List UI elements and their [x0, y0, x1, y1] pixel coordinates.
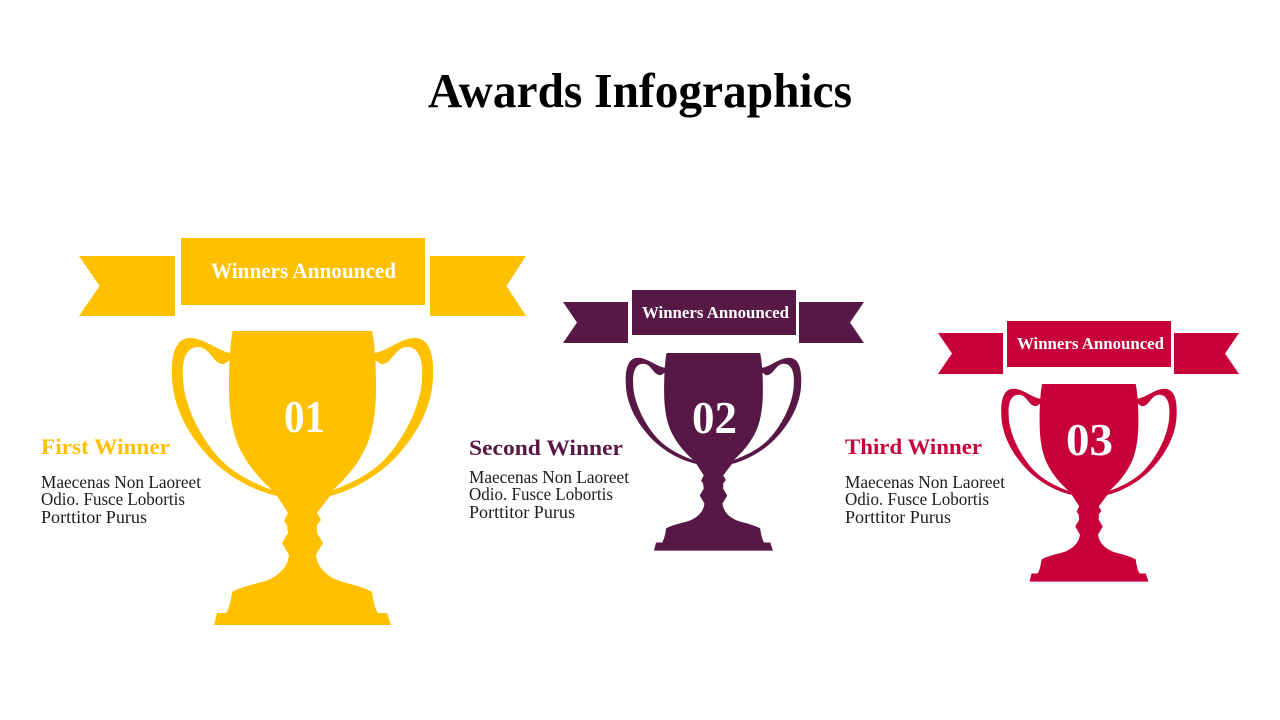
text block: third winner description: Maecenas Non Laoreet [845, 472, 1005, 492]
banner: second winner ribbon [563, 290, 864, 343]
text block: first winner description [41, 472, 201, 527]
text block: third winner description: Porttitor Purus [845, 507, 951, 527]
banner: third winner ribbon: Winners Announced [1017, 334, 1165, 353]
panel: third winner [845, 321, 1239, 582]
panel: first winner [41, 238, 526, 625]
icon: gold trophy [172, 331, 433, 625]
text block: second winner description: Maecenas Non Laoreet [469, 467, 629, 487]
text block: first winner description: Maecenas Non Laoreet [41, 472, 201, 492]
banner: third winner ribbon [938, 321, 1239, 374]
number: 01: 01 [284, 391, 325, 442]
heading: first winner: First Winner [41, 434, 170, 459]
panel: second winner [469, 290, 864, 551]
icon: purple trophy [626, 353, 801, 551]
text block: second winner description: Odio. Fusce Lobortis [469, 484, 613, 504]
text block: second winner description [469, 467, 629, 522]
heading: third winner: Third Winner [845, 434, 982, 459]
number: 03: 03 [1066, 414, 1113, 465]
banner: first winner ribbon: Winners Announced [211, 258, 396, 283]
text block: third winner description: Odio. Fusce Lobortis [845, 489, 989, 509]
icon: red trophy [1001, 384, 1177, 582]
heading: second winner: Second Winner [469, 435, 623, 460]
banner: second winner ribbon: Winners Announced [642, 303, 790, 322]
title: Awards Infographics [428, 63, 852, 118]
text block: first winner description: Porttitor Purus [41, 507, 147, 527]
text block: first winner description: Odio. Fusce Lobortis [41, 489, 185, 509]
banner: first winner ribbon [79, 238, 526, 316]
text block: third winner description [845, 472, 1005, 527]
number: 02: 02 [692, 392, 737, 443]
text block: second winner description: Porttitor Purus [469, 502, 575, 522]
